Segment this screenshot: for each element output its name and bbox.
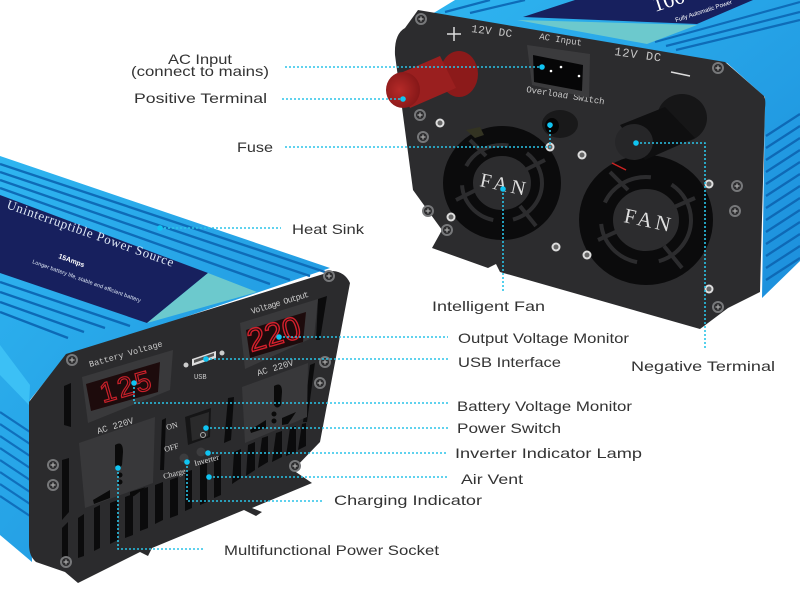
- callout: Inverter Indicator Lamp: [205, 445, 642, 461]
- callout: Heat Sink: [157, 221, 365, 237]
- callout: Charging Indicator: [184, 459, 482, 508]
- panel markings: Overload Switch: [526, 85, 605, 107]
- rear panel: [386, 10, 765, 329]
- callout: Negative Terminal: [631, 140, 775, 374]
- panel markings: [447, 24, 690, 107]
- left inverter unit: [0, 156, 350, 583]
- vents: [62, 296, 327, 558]
- negative terminal: [615, 94, 707, 160]
- battery voltage display: Battery Voltage: [88, 339, 164, 370]
- callout: Multifunctional Power Socket: Multifunctional Power Socket: [224, 542, 439, 558]
- indicator lamps: [162, 448, 220, 481]
- fuse switch: [542, 110, 578, 138]
- voltage output display: 220: [243, 309, 305, 359]
- callout: Multifunctional Power Socket: [115, 465, 439, 558]
- right socket: AC 220V: [256, 358, 296, 379]
- callout: Output Voltage Monitor: [276, 330, 629, 346]
- power switch: OFF: [163, 441, 180, 454]
- callout: Power Switch: [203, 420, 561, 436]
- callout: Air Vent: Air Vent: [461, 471, 523, 487]
- screws: [414, 13, 743, 313]
- left socket: [79, 416, 155, 508]
- callout: USB Interface: [203, 354, 561, 370]
- callout: Intelligent Fan: [432, 186, 545, 314]
- top label panel: [0, 195, 257, 323]
- callout: Positive Terminal: [134, 90, 406, 106]
- callout: Power Switch: Power Switch: [457, 420, 561, 436]
- left fan: [456, 127, 546, 226]
- callout: Output Voltage Monitor: Output Voltage Monitor: [458, 330, 629, 346]
- heat sink body: [0, 156, 330, 562]
- callout: Battery Voltage Monitor: Battery Voltage Monitor: [457, 398, 632, 414]
- USB port: USB: [194, 374, 207, 382]
- left socket: AC 220V: [96, 416, 136, 437]
- callout: Heat Sink: Heat Sink: [292, 221, 365, 237]
- right socket: [242, 358, 308, 443]
- indicator lamps: Inverter: [193, 453, 220, 468]
- right fan: FAN: [622, 203, 673, 237]
- battery voltage display: [82, 339, 173, 423]
- AC input socket: [527, 45, 590, 98]
- battery voltage display: 125: [96, 365, 155, 409]
- panel markings: 12V DC: [471, 24, 513, 41]
- right inverter unit: [386, 0, 800, 329]
- top label panel: Uninterruptible Power Source: [5, 197, 176, 270]
- panel markings: AC Input: [539, 32, 583, 49]
- screws: [47, 270, 335, 568]
- callout: AC Input: [131, 51, 545, 79]
- positive terminal: [386, 51, 478, 108]
- callout: Positive Terminal: Positive Terminal: [134, 90, 267, 106]
- top label panel: Fully Automatic Power: [675, 0, 733, 24]
- right fan: [596, 163, 696, 268]
- top label panel: 15Amps: [57, 253, 85, 269]
- left fan: FAN: [478, 169, 528, 200]
- callout: Fuse: [237, 122, 553, 155]
- callout: Air Vent: [206, 471, 523, 487]
- callout: USB Interface: USB Interface: [458, 354, 561, 370]
- top label panel: [517, 0, 753, 44]
- voltage output display: [240, 290, 318, 369]
- callout: Negative Terminal: Negative Terminal: [631, 358, 775, 374]
- front panel: [29, 270, 350, 583]
- indicator lamps: Charge: [162, 466, 187, 481]
- callout: Inverter Indicator Lamp: Inverter Indicator Lamp: [455, 445, 642, 461]
- callout: AC Input: AC Input: [168, 51, 232, 67]
- voltage output display: Voltage Output: [250, 290, 310, 317]
- callout: AC Input: (connect to mains): [131, 63, 269, 79]
- USB port: [184, 350, 224, 382]
- callout: Charging Indicator: Charging Indicator: [334, 492, 482, 508]
- panel markings: 12V DC: [613, 45, 662, 66]
- callout: Fuse: Fuse: [237, 139, 273, 155]
- heat sink body: [418, 0, 800, 298]
- top label panel: Longer battery life, stable and efficient battery: [31, 259, 142, 304]
- power switch: [163, 408, 211, 454]
- callout: Battery Voltage Monitor: [131, 380, 632, 414]
- callout: Intelligent Fan: Intelligent Fan: [432, 298, 545, 314]
- power switch: ON: [165, 420, 179, 432]
